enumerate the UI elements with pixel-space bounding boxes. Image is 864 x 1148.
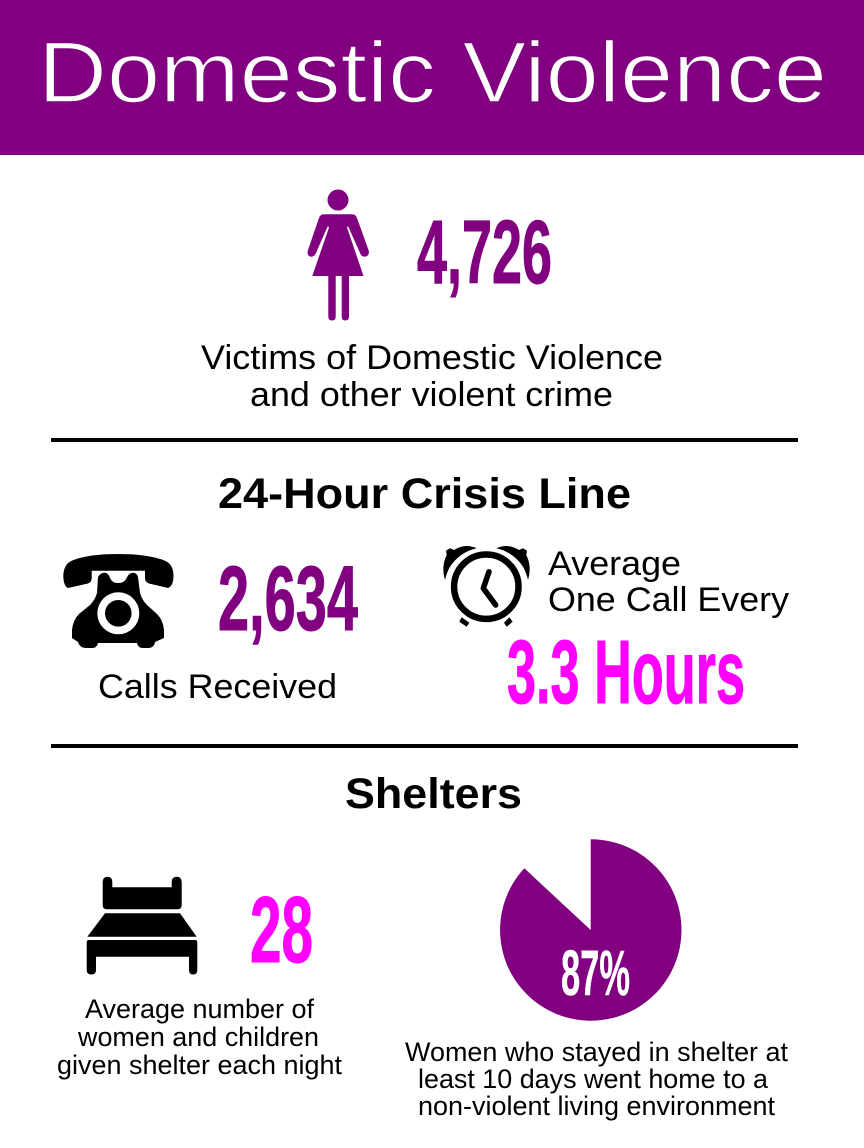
text: pie caption: non-violent living environment <box>418 1091 775 1121</box>
chart: pie 87% <box>500 839 681 1021</box>
text: shelter caption: given shelter each night <box>57 1050 342 1080</box>
title banner <box>0 0 864 155</box>
text: shelter caption: Average number of <box>85 994 314 1024</box>
heading: shelters: Shelters <box>345 770 522 818</box>
number: 87%: 87% <box>561 937 630 1009</box>
text: shelter caption <box>57 994 342 1080</box>
text: victims caption: Victims of Domestic Violence <box>201 339 663 377</box>
text: pie caption: Women who stayed in shelter at <box>405 1037 788 1067</box>
number: calls received: 2,634 <box>218 548 358 650</box>
icon: bed <box>87 877 197 974</box>
text: pie caption: least 10 days went home to a <box>418 1064 769 1094</box>
icon: alarm clock <box>443 546 530 627</box>
text: average one call every <box>548 545 789 619</box>
text: victims caption: and other violent crime <box>250 376 613 414</box>
icon: telephone <box>63 554 173 648</box>
text: victims caption <box>201 339 663 414</box>
heading: crisis line: 24-Hour Crisis Line <box>218 470 631 518</box>
icon: woman <box>308 190 369 320</box>
text: average one call every: Average <box>548 545 681 583</box>
text: average one call every: One Call Every <box>548 581 789 619</box>
text: calls received caption: Calls Received <box>98 668 337 706</box>
text: shelter caption: women and children <box>77 1022 319 1052</box>
number: average shelter: 28 <box>250 877 313 982</box>
number: victims: 4,726 <box>417 203 552 303</box>
title: Domestic Violence <box>38 25 827 121</box>
text: pie caption <box>405 1037 788 1121</box>
